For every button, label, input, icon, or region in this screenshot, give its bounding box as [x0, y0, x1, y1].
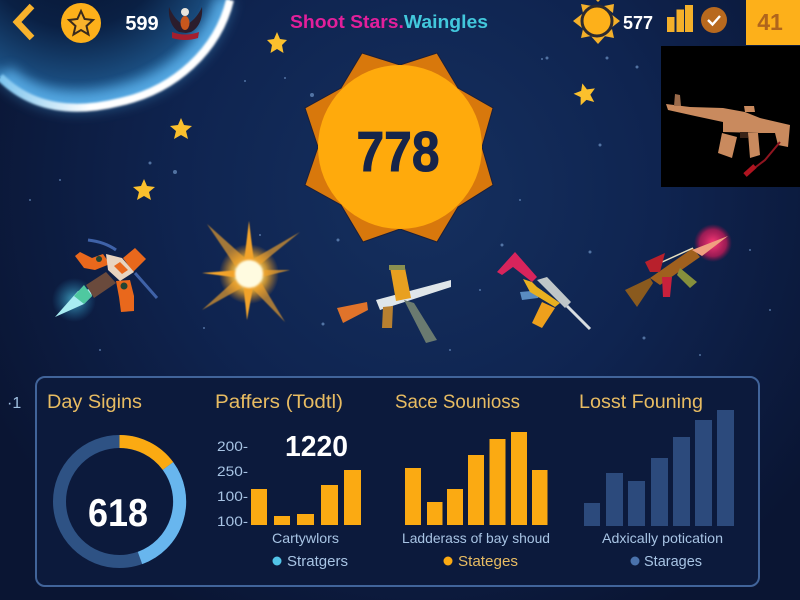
sun icon: [573, 0, 620, 44]
bar chart: paffers: 100-: [217, 488, 248, 504]
bar chart: paffers: Cartywlors: [272, 530, 339, 546]
pink-muzzle rifle: [625, 224, 732, 307]
bar chart: sace sounioss: Ladderass of bay shoud: [402, 530, 550, 546]
planet with glowing rim: [0, 0, 230, 108]
level box 41: [746, 0, 800, 45]
check badge icon: [701, 7, 727, 33]
signal bars icon: [667, 5, 693, 32]
big sun badge 778: [305, 53, 493, 242]
bar chart: losst founing: Adxically potication: [602, 530, 723, 546]
heading: day signins: Day Sigins: [47, 392, 142, 413]
heading: losst founing: Losst Founing: [579, 392, 703, 413]
title: Shoot Stars. Waingles: [290, 11, 488, 32]
score 599: 599: [125, 13, 159, 35]
bar chart: sace sounioss: Stateges: [458, 553, 518, 570]
bar chart: paffers: 200-: [217, 438, 248, 454]
heading: sace sounioss: Sace Sounioss: [395, 392, 520, 413]
bar chart: sace sounioss: [402, 432, 550, 570]
back chevron icon: [17, 6, 32, 38]
featured rifle panel: [661, 46, 800, 187]
bar chart: losst founing: Starages: [644, 553, 702, 570]
big sun badge 778: 778: [356, 120, 440, 184]
magenta rifle: [497, 252, 590, 329]
donut chart: [60, 441, 180, 562]
bar chart: paffers: Stratgers: [287, 553, 348, 570]
bar chart: paffers: 1220: [285, 431, 348, 463]
bar chart: paffers: [217, 431, 361, 570]
bar chart: paffers: 250-: [217, 463, 248, 479]
orange rifle: [337, 265, 451, 343]
bar chart: paffers: 100-: [217, 513, 248, 529]
star field: [29, 56, 771, 356]
bar chart: losst founing: [584, 410, 734, 570]
star coin icon: [61, 3, 101, 43]
score 577: 577: [623, 13, 653, 33]
floating stars: [133, 32, 598, 200]
level box 41: 41: [757, 9, 783, 35]
stray edge text: ·1: [7, 395, 21, 412]
eagle badge: [169, 7, 202, 40]
stats panel: [36, 377, 759, 586]
explosion: [202, 221, 300, 322]
heading: paffers: Paffers (Todtl): [215, 392, 343, 413]
donut chart: 618: [88, 492, 148, 535]
spaceship: [52, 240, 157, 322]
